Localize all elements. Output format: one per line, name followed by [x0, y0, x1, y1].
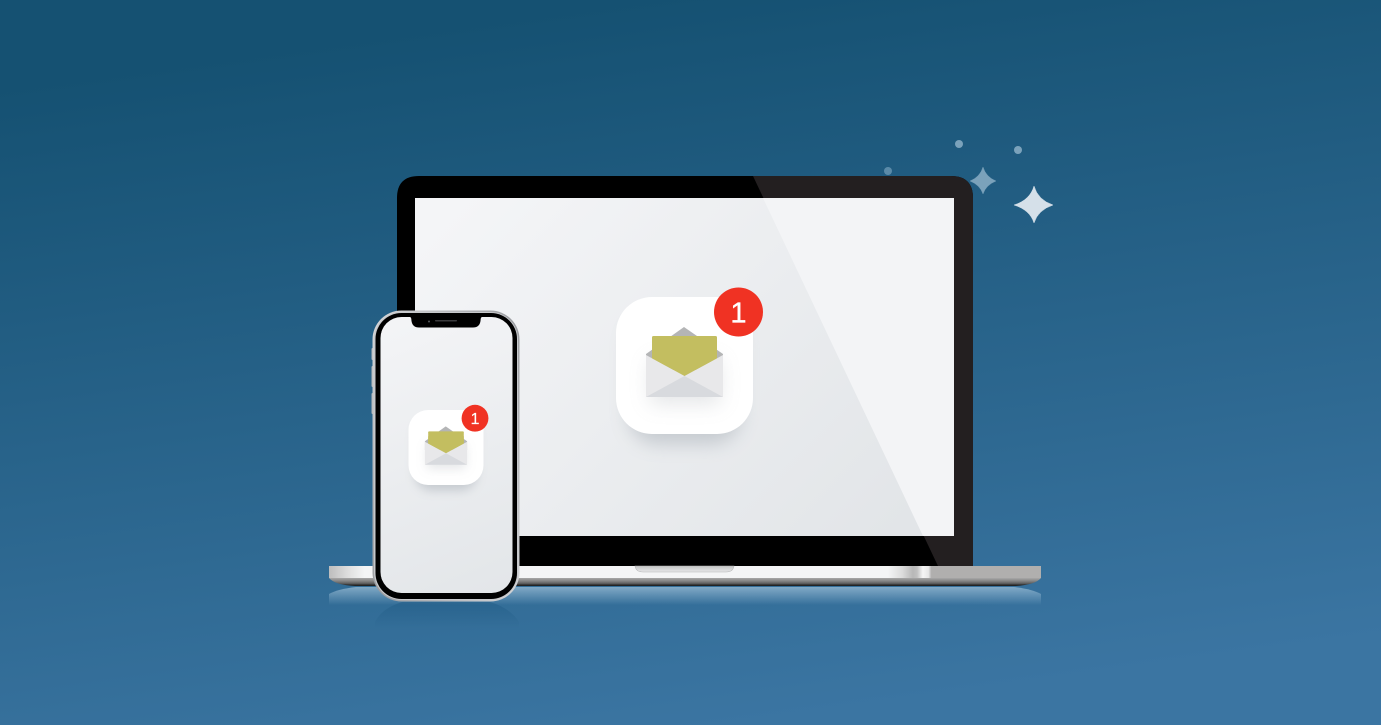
- envelope shadow: [650, 360, 720, 404]
- large mail app icon: [616, 288, 763, 444]
- lid glare edge: [753, 176, 973, 566]
- laptop reflection: [329, 587, 1041, 605]
- envelope: [646, 327, 723, 397]
- small notification badge: 1: [471, 411, 480, 428]
- trackpad notch: [635, 566, 734, 572]
- laptop: [329, 176, 1041, 586]
- laptop base: [329, 566, 1041, 586]
- screen glare: [763, 198, 954, 536]
- small mail app icon: [408, 405, 488, 490]
- side buttons: [372, 348, 374, 360]
- notification badge: 1: [730, 298, 747, 330]
- small envelope shadow: [427, 444, 465, 469]
- icon tile: [616, 297, 753, 434]
- phone frame: [372, 310, 520, 602]
- icon shadow: [628, 316, 741, 444]
- small icon shadow: [415, 420, 477, 490]
- small icon tile: [408, 410, 483, 485]
- phone: [372, 310, 520, 602]
- laptop lid: [397, 176, 973, 566]
- decorative sparkles: [884, 140, 1053, 223]
- laptop screen: [415, 198, 954, 536]
- phone reflection: [375, 602, 519, 628]
- phone screen: [380, 317, 512, 593]
- small envelope: [425, 426, 467, 465]
- notch: [409, 316, 483, 328]
- notification badge: [714, 288, 763, 336]
- speaker: [435, 320, 457, 322]
